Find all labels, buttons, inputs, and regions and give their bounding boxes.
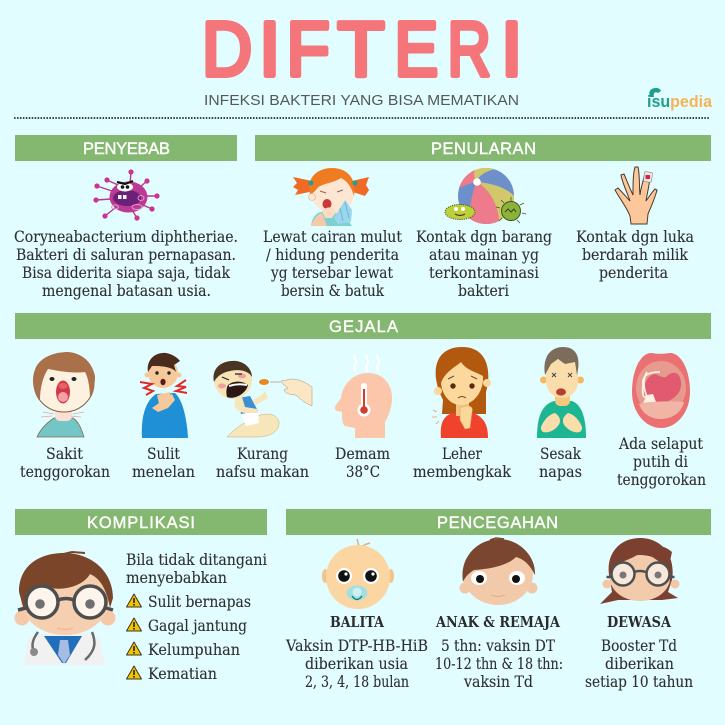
heading: gejala: GEJALA [329, 318, 398, 336]
panel: pencegahan [285, 509, 711, 691]
list: Gagal jantung: Gagal jantung [148, 617, 247, 635]
text: balita: Vaksin DTP-HB-HiB [285, 637, 428, 655]
text: gejala labels: Sesak [540, 445, 582, 463]
text: anak dan remaja [435, 613, 563, 691]
text: gejala labels [20, 435, 706, 489]
text: gejala labels: Leher [442, 445, 483, 463]
text: penularan 2: atau mainan yg [429, 246, 539, 264]
text: gejala labels: Sulit [147, 445, 181, 463]
text: penyebab: Coryneabacterium diphtheriae. [14, 228, 238, 246]
text: gejala labels: Sakit [46, 445, 84, 463]
text: penularan 3: berdarah milik [582, 246, 689, 264]
title: E [394, 7, 438, 93]
text: balita: BALITA [330, 613, 384, 631]
heading: gejala [15, 313, 711, 339]
text: balita [285, 613, 428, 691]
text: penularan 3: penderita [599, 264, 668, 282]
title: I [259, 6, 280, 92]
text: komplikasi intro [126, 551, 267, 587]
title [202, 5, 522, 93]
icon: man short of breath [537, 347, 586, 438]
heading: komplikasi: KOMPLIKASI [87, 514, 195, 532]
icon: woman with swollen neck [432, 347, 491, 438]
text: penyebab: Bisa diderita siapa saja, tidak [22, 264, 231, 282]
text: anak dan remaja: 5 thn: vaksin DT [441, 637, 556, 655]
panel: penyebab [14, 135, 238, 300]
text: gejala labels: 38°C [346, 463, 380, 481]
panel: gejala [15, 313, 711, 489]
text: gejala labels: Kurang [237, 445, 288, 463]
heading: penularan: PENULARAN [431, 140, 536, 158]
text: penularan 1: / hidung penderita [266, 246, 399, 264]
text: balita: 2, 3, 4, 18 bulan [305, 673, 409, 691]
text: gejala labels: Demam [335, 445, 390, 463]
text: komplikasi intro: Bila tidak ditangani [126, 551, 267, 569]
heading: pencegahan: PENCEGAHAN [437, 514, 558, 532]
text: gejala labels: nafsu makan [216, 463, 309, 481]
text: gejala labels: Ada selaput [618, 435, 704, 453]
list: Kematian: Kematian [148, 665, 217, 683]
text: penyebab: Bakteri di saluran pernapasan. [16, 246, 236, 264]
text: penularan 2: Kontak dgn barang [416, 228, 552, 246]
text: dewasa [585, 613, 693, 691]
text: gejala labels: tenggorokan [20, 463, 110, 481]
text: gejala labels: putih di [633, 453, 688, 471]
text: gejala labels: tenggorokan [617, 471, 706, 489]
heading: penularan [255, 135, 711, 161]
text: dewasa: setiap 10 tahun [585, 673, 693, 691]
icon: boy with pain swallowing [140, 353, 188, 438]
text: dewasa: diberikan [605, 655, 674, 673]
text: anak dan remaja: ANAK & REMAJA [435, 613, 560, 631]
text: gejala labels: napas [539, 463, 582, 481]
text: anak dan remaja: vaksin Td [463, 673, 533, 691]
text: penularan 1 [263, 228, 403, 300]
text: penularan 1: Lewat cairan mulut [263, 228, 403, 246]
text: penyebab [14, 228, 238, 300]
heading: penyebab [15, 135, 237, 161]
heading: pencegahan [286, 509, 711, 535]
text: gejala labels: membengkak [413, 463, 512, 481]
list: Sulit bernapas: Sulit bernapas [148, 593, 251, 611]
text: balita: diberikan usia [305, 655, 408, 673]
icon: crying baby refusing food [214, 361, 312, 437]
text: dewasa: Booster Td [601, 637, 677, 655]
title: I [501, 6, 522, 92]
text: penularan 1: bersin & batuk [281, 282, 385, 300]
text: komplikasi intro: menyebabkan [126, 569, 227, 587]
icon: adult woman face [600, 538, 680, 604]
icon: fever head [335, 355, 392, 438]
text: penularan 2: bakteri [458, 282, 509, 300]
icon: doctor [14, 552, 116, 665]
text: penularan 2: terkontaminasi [429, 264, 539, 282]
title: F [286, 6, 330, 92]
text: penularan 3 [576, 228, 694, 282]
panel: penularan [255, 135, 711, 300]
icon: sore throat boy [33, 352, 95, 437]
text: penyebab: mengenal batasan usia. [42, 282, 211, 300]
text: dewasa: DEWASA [607, 613, 671, 631]
list: Kelumpuhan: Kelumpuhan [148, 641, 240, 659]
heading: komplikasi [15, 509, 267, 535]
icon: sneezing girl [293, 168, 369, 226]
text: penularan 3: Kontak dgn luka [576, 228, 694, 246]
logo: isupedia: isupedia [647, 92, 713, 111]
heading: penyebab: PENYEBAB [83, 140, 170, 158]
title: D [202, 6, 252, 92]
icon: purple bacteria [93, 169, 160, 221]
panel: komplikasi [14, 509, 267, 683]
subtitle: INFEKSI BAKTERI YANG BISA MEMATIKAN [204, 93, 519, 109]
icon: baby face [322, 539, 394, 609]
title: T [338, 6, 385, 92]
text: anak dan remaja: 10-12 thn & 18 thn: [435, 655, 563, 673]
text: penularan 2 [416, 228, 552, 300]
icon: beach ball with germs [445, 168, 526, 224]
icon: injured hand [615, 167, 657, 224]
icon: child face [460, 538, 538, 605]
icon: mouth with white throat membrane [632, 353, 690, 428]
title: R [448, 5, 491, 92]
text: penularan 1: yg tersebar lewat [270, 264, 394, 282]
text: gejala labels: menelan [132, 463, 195, 481]
